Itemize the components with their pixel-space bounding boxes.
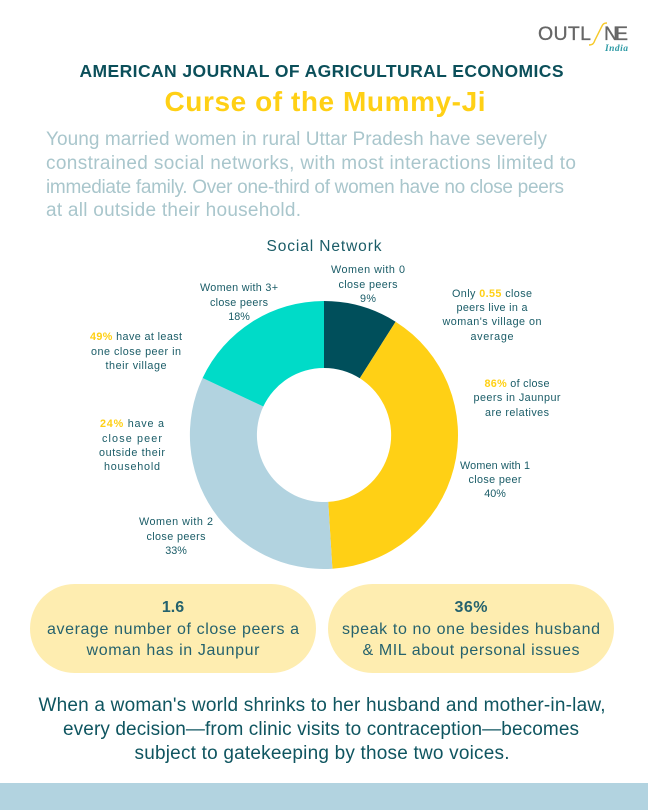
stat card: 1.6 average close peers: woman has in Jaunpur — [86, 642, 260, 659]
label: women with 1 close peer — [460, 460, 530, 500]
closing statement: subject to gatekeeping by those two voices. — [134, 743, 510, 764]
label: 24% outside household: 24% have a — [100, 418, 164, 430]
label: women with 3+ close peers — [200, 282, 278, 323]
closing statement: When a woman's world shrinks to her husband and mother-in-law, — [38, 695, 606, 716]
title: Curse of the Mummy-Ji — [164, 86, 486, 117]
label: women with 1 close peer: close peer — [468, 474, 522, 486]
label: women with 3+ close peers: close peers — [210, 297, 269, 309]
stat card: 36% speak to no one: & MIL about personal issues — [362, 642, 580, 659]
label: women with 3+ close peers: Women with 3+ — [200, 282, 278, 294]
closing statement — [38, 695, 606, 764]
segment: 1 close peer 40% — [328, 322, 458, 569]
label: women with 0 close peers — [331, 264, 405, 305]
label: 49% in their village: 49% have at least — [90, 331, 182, 343]
intro paragraph: Young married women in rural Uttar Pradesh have severely — [46, 129, 548, 150]
segment: 3+ close peers 18% — [203, 301, 324, 406]
label: 49% in their village: their village — [106, 360, 166, 372]
label: only 0.55 close peers: Only 0.55 close — [452, 288, 532, 300]
heading: journal name: AMERICAN JOURNAL OF AGRICULTURAL ECONOMICS — [80, 61, 564, 81]
logo: Outline India: India — [604, 44, 628, 54]
label: women with 1 close peer: 40% — [484, 488, 506, 500]
stat card: 1.6 average close peers: 1.6 — [162, 599, 184, 616]
label: women with 2 close peers: Women with 2 — [139, 516, 213, 528]
intro paragraph — [46, 129, 576, 221]
label: only 0.55 close peers: woman's village on — [442, 316, 542, 328]
footer band — [0, 783, 648, 810]
closing statement: every decision—from clinic visits to contraception—becomes — [63, 719, 579, 740]
label: 24% outside household: household — [104, 461, 160, 473]
intro paragraph: at all outside their household. — [46, 200, 301, 221]
label: only 0.55 close peers: average — [470, 331, 514, 343]
label: women with 2 close peers: 33% — [165, 545, 187, 557]
logo: Outline India — [538, 23, 628, 54]
donut chart: social network — [190, 301, 458, 569]
label: women with 2 close peers: close peers — [146, 531, 206, 543]
intro paragraph: immediate family. Over one-third of women have no close peers — [46, 177, 564, 198]
label: 86% relatives — [474, 378, 561, 419]
label: women with 2 close peers — [139, 516, 213, 557]
intro paragraph: constrained social networks, with most interactions limited to — [46, 153, 576, 174]
stat card: 36% speak to no one: speak to no one besides husband — [342, 621, 600, 638]
chart title: Social Network — [266, 238, 382, 255]
label: 49% in their village — [90, 331, 182, 372]
stat card: 36% speak to no one — [328, 584, 614, 673]
label: women with 0 close peers: 9% — [360, 293, 376, 305]
logo: Outline India: OUTL — [538, 23, 591, 45]
label: 49% in their village: one close peer in — [91, 346, 181, 358]
label: 86% relatives: peers in Jaunpur — [474, 392, 561, 404]
stat card: 1.6 average close peers — [30, 584, 316, 673]
stat card: 1.6 average close peers: average number of close peers a — [47, 621, 299, 638]
segment: 0 close peers 9% — [324, 301, 396, 378]
label: women with 0 close peers: close peers — [338, 279, 398, 291]
stat card: 36% speak to no one: 36% — [454, 599, 488, 616]
label: women with 1 close peer: Women with 1 — [460, 460, 530, 472]
label: only 0.55 close peers — [442, 288, 542, 343]
label: women with 0 close peers: Women with 0 — [331, 264, 405, 276]
label: only 0.55 close peers: peers live in a — [456, 302, 528, 314]
segment: 2 close peers 33% — [190, 378, 332, 569]
label: 24% outside household: outside their — [99, 447, 165, 459]
label: 86% relatives: are relatives — [485, 407, 550, 419]
label: 24% outside household — [99, 418, 165, 473]
label: 24% outside household: close peer — [102, 433, 162, 445]
label: 86% relatives: 86% of close — [484, 378, 550, 390]
logo: Outline India: NE — [604, 23, 628, 45]
label: women with 3+ close peers: 18% — [228, 311, 250, 323]
